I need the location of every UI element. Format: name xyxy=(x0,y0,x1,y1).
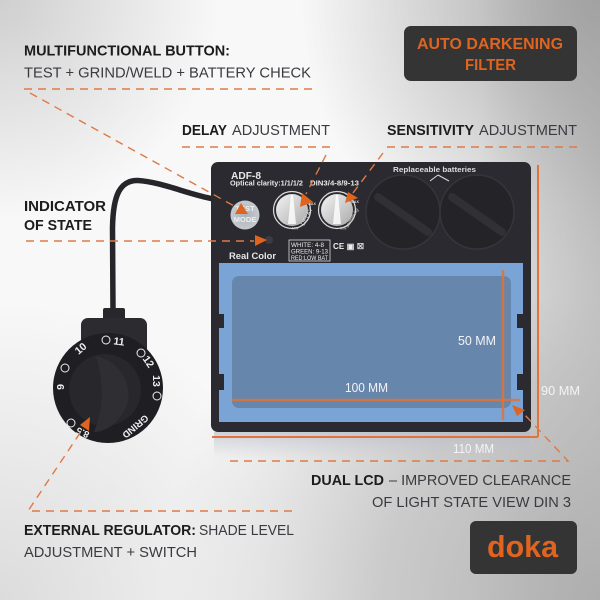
real color label: Real Color xyxy=(229,251,277,261)
text: external regulator: SHADE LEVEL xyxy=(199,522,294,539)
scale numbers xyxy=(55,335,162,440)
sensitivity dial: sensitivity xyxy=(345,207,361,229)
dimension: 110 mm: 110 MM xyxy=(453,442,494,456)
dimension: 100 mm: 100 MM xyxy=(345,381,388,395)
text: sensitivity adjustment: ADJUSTMENT xyxy=(479,122,577,139)
arrow: multifunctional button xyxy=(24,89,312,214)
model label: ADF-8 xyxy=(231,171,261,182)
text: delay adjustment: DELAY xyxy=(182,122,227,139)
text: dual lcd xyxy=(311,472,571,511)
blue lens window xyxy=(219,263,523,422)
heading badge: auto darkening filter xyxy=(404,26,577,81)
external regulator knob xyxy=(53,308,163,443)
arrow: dual lcd xyxy=(230,405,568,461)
panel: auto darkening filter cartridge xyxy=(211,162,531,432)
text: external regulator: EXTERNAL REGULATOR: xyxy=(24,522,196,539)
scale numbers: 13 xyxy=(150,375,162,387)
inner dark LCD view xyxy=(232,276,511,408)
text: external regulator: ADJUSTMENT + SWITCH xyxy=(24,544,197,561)
sensitivity dial xyxy=(318,192,361,230)
shade legend: GREEN: 9-13 xyxy=(291,250,329,256)
text: multifunctional button: MULTIFUNCTIONAL BUTTON: xyxy=(24,42,230,60)
mode button: MODE xyxy=(234,215,256,224)
delay dial xyxy=(274,192,316,230)
indicator light xyxy=(265,236,273,244)
text: dual lcd: – IMPROVED CLEARANCE xyxy=(389,472,571,489)
text: multifunctional button: TEST + GRIND/WELD + BATTERY CHECK xyxy=(24,64,311,82)
side clips xyxy=(219,314,523,390)
certification marks: CE ▣ ☒ xyxy=(333,242,364,251)
scale numbers: 12 xyxy=(140,354,156,370)
scale numbers: 9 xyxy=(55,384,67,390)
battery labels: Replaceable batteries xyxy=(393,165,476,174)
delay dial: DELAY xyxy=(300,207,315,227)
text: delay adjustment: ADJUSTMENT xyxy=(232,122,330,139)
delay dial: MIN xyxy=(292,226,299,230)
battery labels xyxy=(393,165,476,181)
panel reflection xyxy=(214,432,530,458)
sensitivity dial: MIN xyxy=(340,226,347,230)
dial ring xyxy=(53,333,163,443)
delay dial: MAX xyxy=(308,202,316,206)
arrow: indicator of state xyxy=(26,235,267,246)
text: dual lcd: DUAL LCD xyxy=(311,472,384,489)
text: external regulator xyxy=(24,522,294,561)
model label: DIN3/4-8/9-13 xyxy=(310,180,359,188)
heading badge: auto darkening filter: AUTO DARKENING xyxy=(417,36,563,53)
scale numbers: GRIND xyxy=(120,412,150,440)
connector block xyxy=(81,308,147,358)
arrow: delay xyxy=(182,147,330,207)
scale numbers: 10 xyxy=(73,341,89,357)
knob body xyxy=(69,354,141,426)
text: dual lcd: OF LIGHT STATE VIEW DIN 3 xyxy=(372,494,571,511)
battery cover left xyxy=(366,175,440,249)
mode button: TEST xyxy=(235,204,255,213)
logo badge: doka xyxy=(470,521,577,574)
model label xyxy=(230,171,359,188)
text: sensitivity adjustment xyxy=(387,122,577,139)
cable xyxy=(112,180,214,312)
text: sensitivity adjustment: SENSITIVITY xyxy=(387,122,474,139)
text: indicator of state xyxy=(24,198,106,234)
text: multifunctional button xyxy=(24,42,311,82)
text: indicator of state: INDICATOR xyxy=(24,198,106,215)
shade legend: RED:LOW BAT xyxy=(291,256,328,262)
arrow: external regulator xyxy=(28,417,292,511)
text: delay adjustment xyxy=(182,122,330,139)
shade legend xyxy=(289,240,330,262)
scale numbers: 8.5 xyxy=(74,424,91,440)
battery cover right xyxy=(440,175,514,249)
model label: Optical clarity:1/1/1/2 xyxy=(230,180,303,188)
knob pointer xyxy=(94,356,129,432)
dimension: 50 mm: 50 MM xyxy=(458,334,496,348)
text: indicator of state: OF STATE xyxy=(24,217,92,234)
sensitivity dial: MAX xyxy=(351,200,359,204)
heading badge: auto darkening filter: FILTER xyxy=(465,57,516,74)
mode button xyxy=(230,200,260,230)
arrow: sensitivity xyxy=(345,147,577,203)
scale numbers: 11 xyxy=(113,335,125,349)
shade legend: WHITE: 4-8 xyxy=(291,243,325,249)
logo badge: doka: doka xyxy=(487,529,559,564)
dimension: 90 mm: 90 MM xyxy=(541,384,580,398)
